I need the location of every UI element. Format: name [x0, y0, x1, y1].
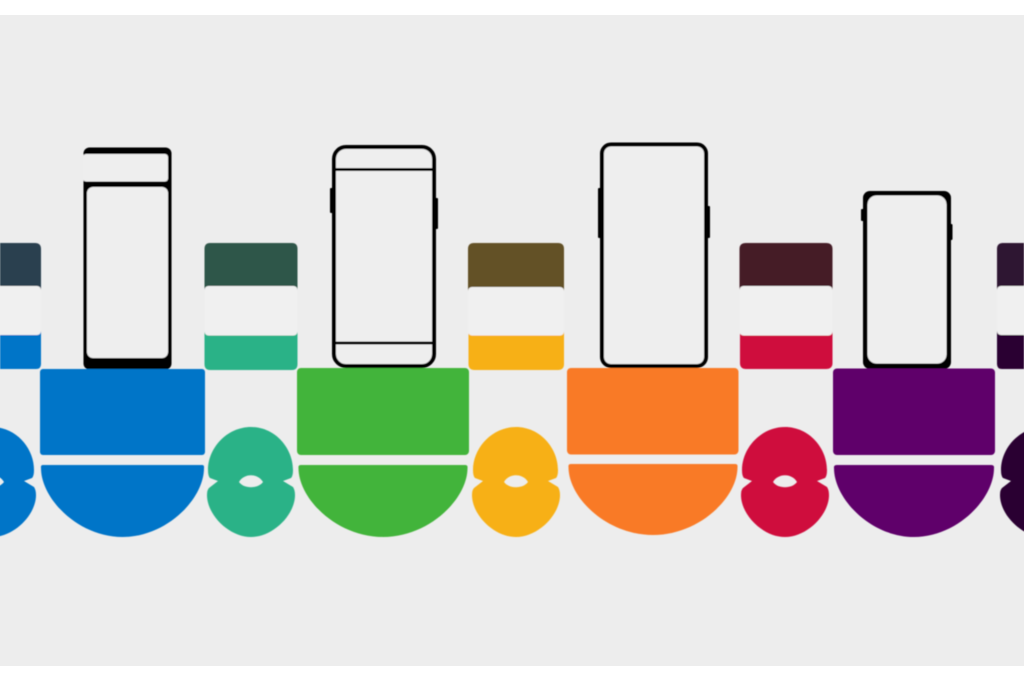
tile: dark purple (cropped right): [997, 243, 1024, 369]
illustration row: [0, 144, 1024, 537]
blob: dark purple (cropped right): [1000, 427, 1024, 537]
phone 1: [83, 148, 172, 370]
tile: blue (cropped left): [0, 243, 41, 369]
phone 4: [861, 191, 952, 369]
tile: crimson: [740, 243, 832, 369]
blob: gold: [472, 427, 560, 537]
tile: gold: [468, 243, 564, 370]
phone 2: [330, 147, 438, 366]
panel: green base: [297, 368, 469, 537]
blob: crimson: [741, 427, 829, 537]
blob: teal: [207, 427, 295, 537]
panel: orange base: [567, 368, 738, 535]
panel: purple base: [833, 368, 995, 537]
tile: teal: [204, 243, 298, 370]
panel: blue base: [40, 369, 205, 537]
blob: blue (cropped left): [0, 427, 36, 537]
phone 3: [598, 144, 710, 366]
